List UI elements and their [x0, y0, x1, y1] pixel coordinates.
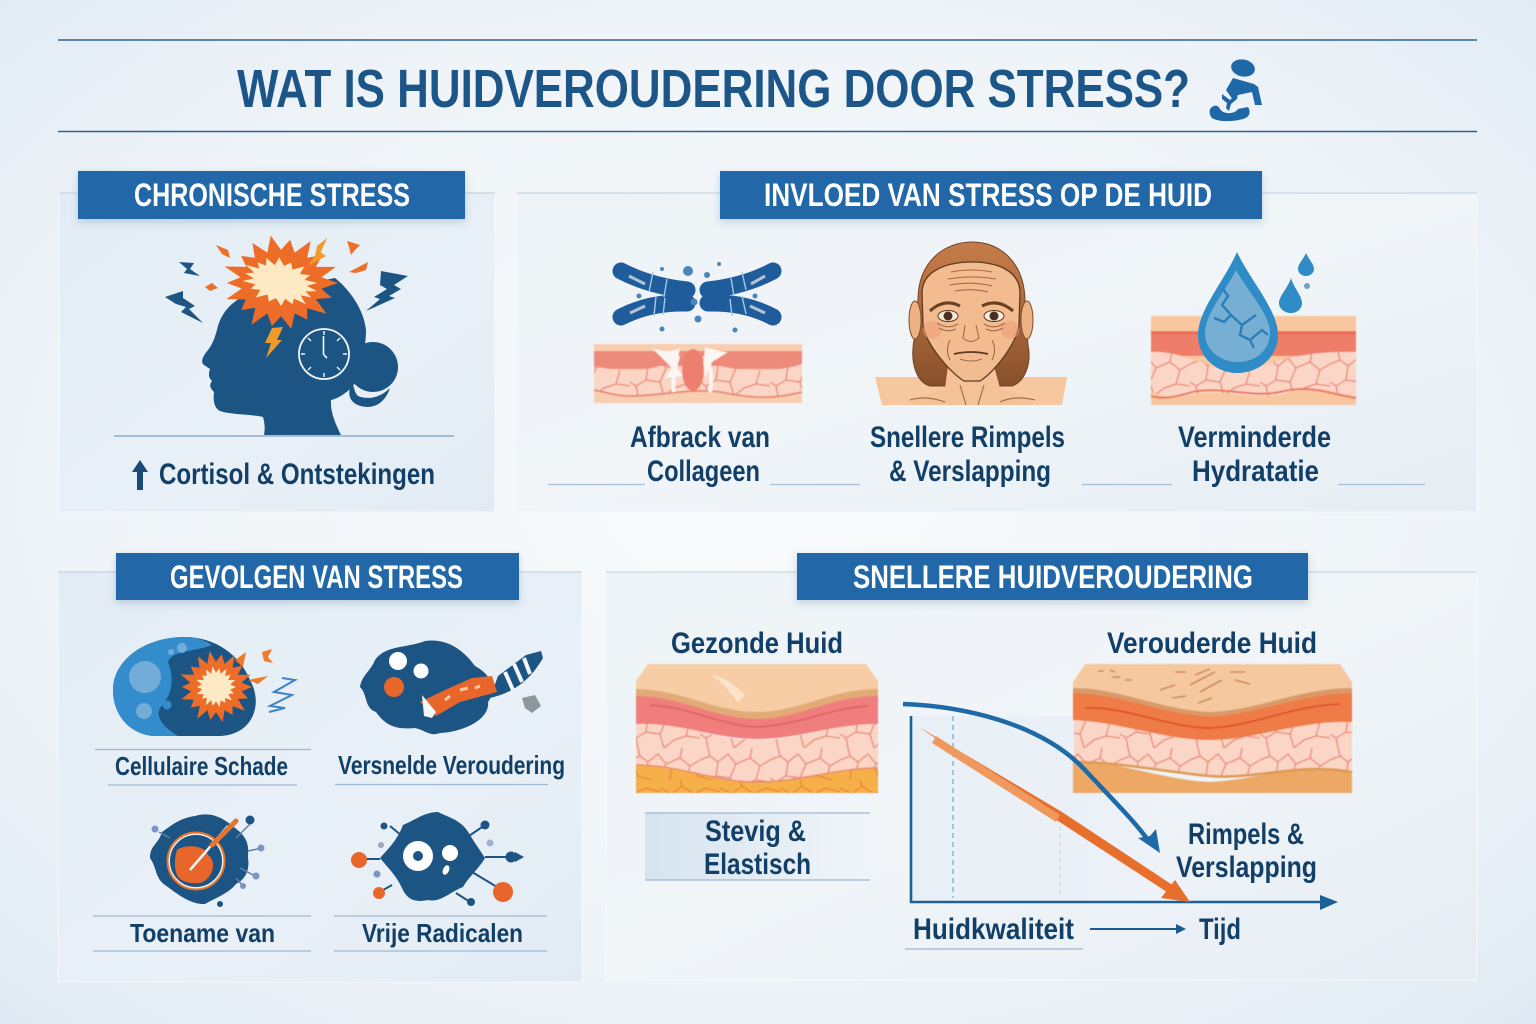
panel: snellere huidveroudering — [606, 553, 1477, 980]
icon: water drop on dry skin — [1151, 252, 1356, 405]
label: rimpels en verslapping: Verslapping — [1176, 851, 1317, 884]
heading: invloed: INVLOED VAN STRESS OP DE HUID — [764, 177, 1212, 213]
label: stevig en elastisch: Elastisch — [704, 848, 811, 881]
heading: chronische stress — [78, 171, 465, 219]
icon: collagen fibres — [621, 262, 773, 332]
heading: snellere huidveroudering — [797, 553, 1308, 600]
icon: skin inspection — [1210, 57, 1262, 121]
label: gezonde huid: Gezonde Huid — [671, 627, 843, 660]
label: tijd: Tijd — [1199, 913, 1241, 946]
label: cellulaire schade: Cellulaire Schade — [115, 751, 288, 781]
arrow: kwaliteit naar tijd — [1090, 924, 1186, 934]
icon: up arrow — [132, 460, 148, 490]
title: WAT IS HUIDVEROUDERING DOOR STRESS? — [237, 59, 1190, 119]
label: collagen: Afbrack van — [630, 421, 770, 454]
label: cortisol: Cortisol & Ontstekingen — [159, 458, 435, 491]
heading: snellere huidveroudering: SNELLERE HUIDVEROUDERING — [853, 559, 1253, 595]
panel: gevolgen van stress — [58, 553, 582, 982]
illustration: healthy skin block — [636, 664, 878, 793]
label: hydration: Hydratatie — [1192, 455, 1319, 488]
label: toename van: Toename van — [130, 918, 275, 948]
label: wrinkles: Snellere Rimpels — [870, 421, 1065, 454]
illustration: aged face — [875, 242, 1067, 405]
label: stevig en elastisch — [645, 813, 870, 881]
icon: inflammation cell — [150, 814, 264, 907]
label: versnelde veroudering: Versnelde Veroudering — [338, 750, 565, 780]
label: verouderde huid: Verouderde Huid — [1107, 627, 1317, 660]
panel: chronische stress — [59, 171, 495, 512]
illustration: aged skin block — [1073, 664, 1352, 793]
heading: gevolgen — [116, 553, 519, 600]
icon: cellular damage — [113, 637, 295, 736]
label: hydration — [1178, 421, 1331, 488]
icon: free radicals — [351, 812, 524, 906]
chart backdrop — [912, 716, 1182, 900]
label: wrinkles: & Verslapping — [889, 455, 1051, 488]
label: stevig en elastisch: Stevig & — [705, 815, 806, 848]
label: wrinkles — [870, 421, 1065, 488]
label: vrije radicalen: Vrije Radicalen — [362, 918, 523, 948]
label: rimpels en verslapping — [1176, 818, 1317, 884]
label: huidkwaliteit: Huidkwaliteit — [913, 913, 1074, 946]
label: hydration: Verminderde — [1178, 421, 1331, 454]
line chart: huidkwaliteit over tijd — [903, 704, 1338, 910]
heading: chronische stress: CHRONISCHE STRESS — [134, 177, 410, 213]
icon: damaged skin strip — [594, 344, 802, 403]
heading: gevolgen: GEVOLGEN VAN STRESS — [170, 559, 463, 595]
label: collagen: Collageen — [647, 455, 760, 488]
icon: head with explosion and clock — [165, 236, 408, 435]
icon: accelerated ageing — [360, 640, 543, 734]
label: rimpels en verslapping: Rimpels & — [1188, 818, 1304, 851]
heading: invloed — [720, 171, 1262, 219]
label: collagen — [630, 421, 770, 488]
panel: invloed van stress op de huid — [516, 171, 1477, 512]
